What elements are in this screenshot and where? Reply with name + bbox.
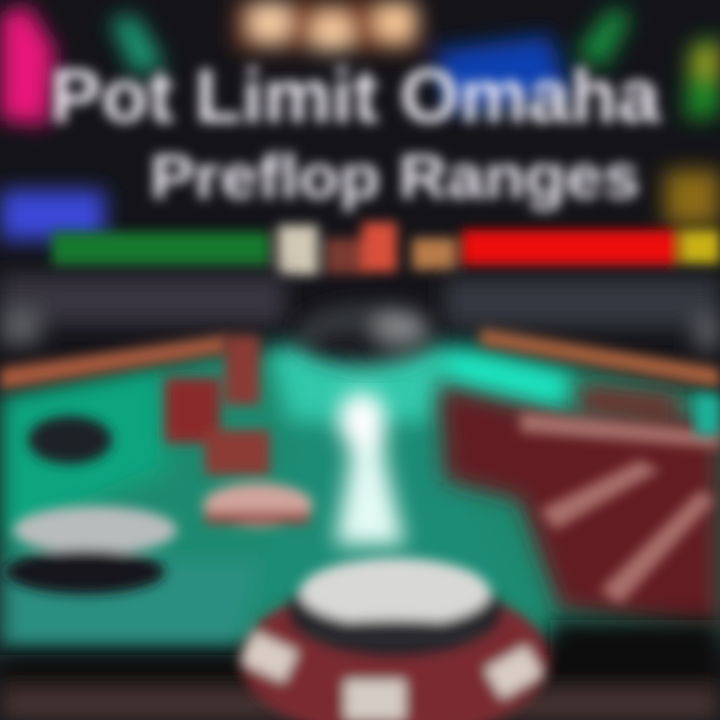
yellow bar <box>680 230 720 264</box>
left cards and chips <box>5 416 177 594</box>
table rail <box>0 328 720 390</box>
bottom floor <box>0 620 720 720</box>
legend bars <box>52 222 720 275</box>
green bar <box>52 232 270 266</box>
centre icons <box>278 222 456 275</box>
title <box>50 54 661 212</box>
left chip stack <box>165 335 313 527</box>
foreground chip <box>240 558 550 720</box>
poker table felt <box>0 345 720 650</box>
grey seating band <box>0 275 720 350</box>
title: Preflop Ranges <box>150 143 640 212</box>
centre dark chips <box>297 305 433 365</box>
right chip stacks <box>440 385 720 630</box>
title: Pot Limit Omaha <box>50 54 661 139</box>
light beam <box>335 392 405 545</box>
red bar <box>462 230 677 266</box>
upper background lights <box>0 0 720 240</box>
